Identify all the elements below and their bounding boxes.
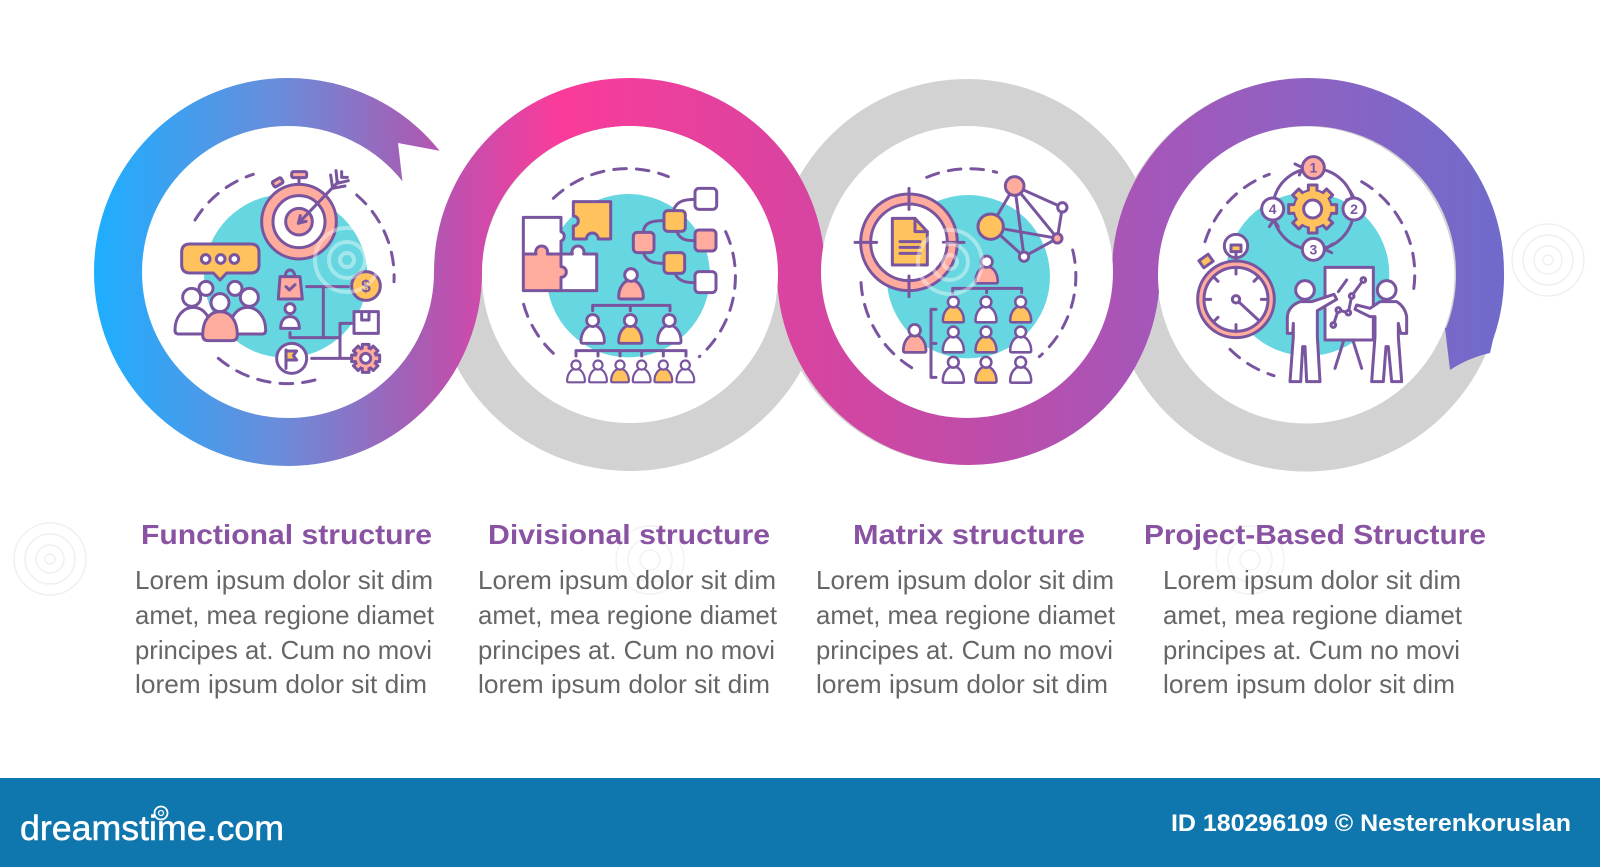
text: matrix structure: Matrix structure: [853, 519, 1085, 550]
icon: project-based structure: 1: [1309, 160, 1317, 176]
icon: functional structure: $: [361, 276, 371, 296]
text: divisional structure: Divisional structure: [488, 519, 770, 550]
grey ring 3: [798, 103, 1136, 441]
text: functional structure: [135, 519, 435, 699]
footer credit: ID 180296109 © Nesterenkoruslan: [1171, 810, 1571, 837]
text: divisional structure: [478, 519, 778, 699]
text: divisional structure: principes at. Cum no movi: [478, 635, 775, 665]
grey ring 2: [458, 103, 802, 447]
grey ring 4: [1134, 102, 1478, 448]
icon: project-based structure: 4: [1269, 201, 1277, 217]
text: project-based structure: Project-Based Structure: [1144, 519, 1486, 550]
text: functional structure: Lorem ipsum dolor sit dim: [135, 565, 433, 595]
icon: matrix structure: [855, 169, 1076, 383]
text: project-based structure: principes at. Cum no movi: [1163, 635, 1460, 665]
text: project-based structure: Lorem ipsum dolor sit dim: [1163, 565, 1461, 595]
footer band: [0, 778, 1600, 867]
icon: project-based structure: [1198, 157, 1415, 382]
white disk 2: [482, 126, 778, 422]
text: divisional structure: Lorem ipsum dolor sit dim: [478, 565, 776, 595]
white disk 4: [1158, 127, 1454, 423]
text: functional structure: amet, mea regione diamet: [135, 600, 435, 630]
text: matrix structure: [816, 519, 1116, 699]
text: functional structure: lorem ipsum dolor sit dim: [135, 669, 427, 699]
icon: functional structure: [175, 171, 394, 384]
text: divisional structure: lorem ipsum dolor sit dim: [478, 669, 770, 699]
text: matrix structure: lorem ipsum dolor sit dim: [816, 669, 1108, 699]
text: project-based structure: [1144, 519, 1486, 699]
text: matrix structure: amet, mea regione diamet: [816, 600, 1116, 630]
text: project-based structure: lorem ipsum dolor sit dim: [1163, 669, 1455, 699]
icon: project-based structure: 3: [1309, 241, 1317, 257]
text: divisional structure: amet, mea regione diamet: [478, 600, 778, 630]
icon: divisional structure: [523, 169, 735, 382]
gradient ribbon: [118, 102, 1497, 442]
text: functional structure: Functional structure: [141, 519, 432, 550]
footer logo: dreamstime.com: [20, 809, 284, 848]
text: project-based structure: amet, mea regione diamet: [1163, 600, 1463, 630]
watermark spirals: [14, 224, 1584, 595]
text: functional structure: principes at. Cum no movi: [135, 635, 432, 665]
text: matrix structure: Lorem ipsum dolor sit dim: [816, 565, 1114, 595]
white disk 3: [821, 126, 1113, 418]
icon: project-based structure: 2: [1350, 201, 1358, 217]
text: matrix structure: principes at. Cum no movi: [816, 635, 1113, 665]
